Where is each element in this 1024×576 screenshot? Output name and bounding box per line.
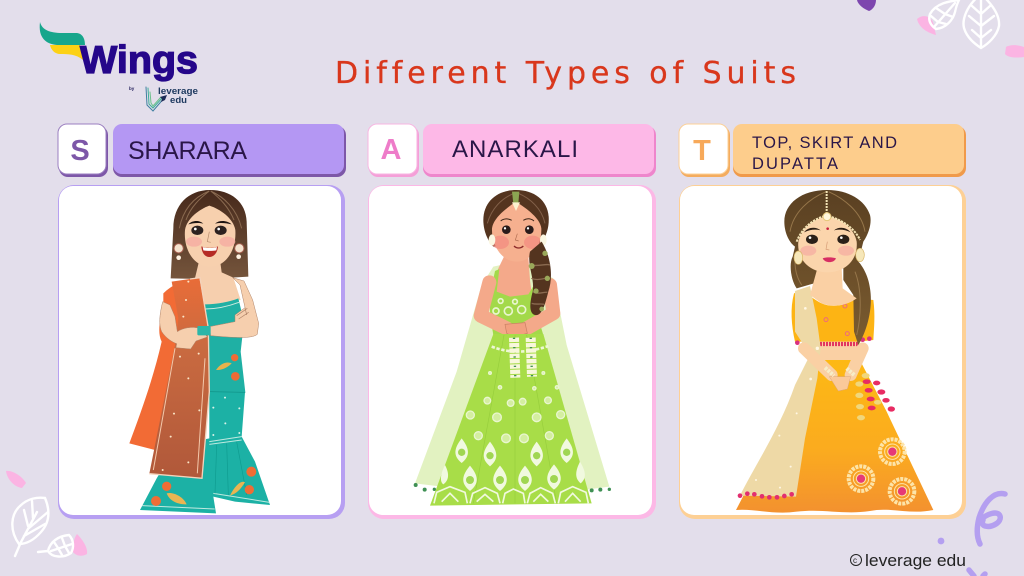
logo byline: by — [129, 86, 135, 91]
earrings — [489, 234, 547, 246]
heading bar: top, skirt and dupatta — [733, 124, 966, 177]
sheer dupatta panel — [149, 278, 209, 478]
forearms — [804, 348, 863, 375]
skirt roundels — [466, 372, 565, 443]
solid orange dupatta — [129, 279, 192, 450]
column: Top, skirt and dupatta — [679, 124, 966, 519]
flared skirt — [430, 334, 592, 506]
logo name second line: edu — [170, 95, 187, 105]
dupatta beads — [738, 491, 794, 500]
heading bar: Anarkali: ANARKALI — [452, 136, 578, 163]
wrist band — [197, 326, 211, 335]
sheer dupatta — [415, 263, 609, 490]
footer text: leverage edu — [865, 551, 966, 570]
bodice — [490, 269, 543, 335]
clasped hands — [829, 377, 851, 391]
panel: Anarkali card — [368, 185, 656, 519]
illustration: woman in lehenga — [736, 190, 933, 513]
teardrop motifs — [441, 438, 585, 491]
letter tile S — [58, 124, 108, 177]
hair — [784, 190, 871, 345]
illustration: woman in sharara — [129, 190, 270, 513]
title: Different Types of Suits — [335, 56, 796, 91]
kurti top — [200, 298, 245, 392]
heading bar: top, skirt and dupatta: DUPATTA — [752, 155, 838, 173]
bangles — [825, 368, 855, 376]
decorative leaves: top right — [857, 0, 1024, 58]
skirt flowers — [849, 439, 914, 504]
hair — [483, 190, 549, 247]
left arm and hand — [160, 302, 207, 349]
letter tile T — [679, 124, 730, 177]
earrings — [794, 248, 864, 264]
copyright glyph: c — [853, 556, 857, 565]
dupatta tassels — [414, 483, 611, 492]
face — [798, 217, 857, 272]
maang tikka and headpiece — [797, 191, 860, 242]
heading bar: Sharara — [113, 124, 346, 177]
hair — [171, 190, 248, 279]
icon: teal wing — [40, 22, 85, 45]
decorative leaves: bottom left — [6, 471, 87, 557]
maang tikka — [512, 192, 519, 210]
logo: Wings by leverage edu — [40, 22, 198, 111]
neck — [810, 268, 857, 306]
decorative squiggle: bottom right — [938, 494, 1005, 576]
tucked fingers — [237, 308, 249, 319]
column: Anarkali — [368, 124, 656, 519]
clasped hands — [505, 323, 527, 337]
icon: yellow wing — [50, 45, 83, 60]
dupatta — [740, 286, 821, 497]
jasmine garlands — [514, 338, 532, 378]
midriff — [813, 342, 858, 360]
logo name: leverage — [158, 86, 198, 96]
sharara pants — [140, 392, 270, 513]
heading bar: Anarkali — [423, 124, 656, 177]
hexagon border — [434, 487, 588, 503]
neck and chest — [193, 260, 241, 306]
right arm, crossed — [209, 278, 259, 337]
face — [492, 202, 541, 262]
icon: rocket — [160, 95, 167, 102]
icon: copyright ring — [850, 554, 862, 566]
panel: Sharara card — [58, 185, 345, 519]
logo wordmark: Wings — [80, 39, 198, 82]
face — [185, 206, 235, 267]
illustration: woman in anarkali — [414, 190, 611, 506]
beaded hem — [820, 337, 858, 350]
heading bar: Sharara: SHARARA — [128, 137, 247, 165]
earrings — [174, 244, 244, 253]
column: Sharara — [58, 124, 346, 519]
copyright footer — [850, 551, 966, 570]
floral tassels — [855, 373, 881, 420]
letter tile T: T — [693, 135, 711, 167]
neck and chest — [492, 257, 532, 300]
arms — [481, 282, 553, 328]
heading bar: top, skirt and dupatta: TOP, SKIRT AND — [752, 134, 897, 152]
skirt — [736, 359, 933, 513]
panel: top, skirt and dupatta card — [679, 185, 966, 519]
letter tile A — [368, 124, 419, 177]
letter tile S: S — [70, 135, 90, 167]
side braid — [529, 242, 551, 315]
blouse — [792, 292, 874, 342]
kurti flowers — [231, 354, 240, 381]
letter tile A: A — [381, 134, 402, 166]
icon: leverage edu V — [146, 87, 165, 111]
